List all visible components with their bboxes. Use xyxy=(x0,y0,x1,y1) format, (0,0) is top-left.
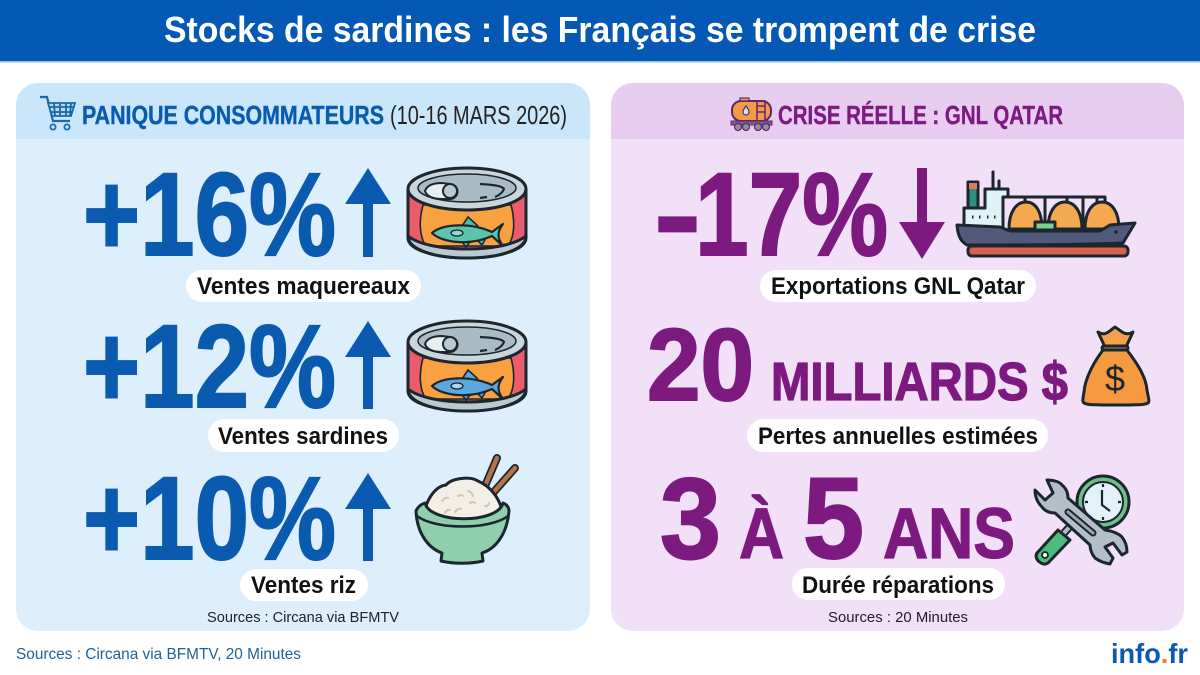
label pill: ventes sardines: Ventes sardines xyxy=(218,423,388,450)
stat: 3 à 5 ans: ANS xyxy=(883,495,1015,574)
label pill: ventes riz: Ventes riz xyxy=(251,572,356,599)
stat: +12%: +12% xyxy=(83,301,336,433)
footer sources: Sources : Circana via BFMTV, 20 Minutes xyxy=(16,646,301,663)
arrow up xyxy=(345,168,391,257)
stat: -17%: 17% xyxy=(695,149,888,281)
icon: money bag xyxy=(1083,327,1149,405)
stat: +16%: +16% xyxy=(83,149,336,281)
arrow down xyxy=(899,168,945,259)
stat: -17% xyxy=(654,149,888,281)
title banner: Stocks de sardines : les Français se trompent de crise xyxy=(164,9,1036,50)
source note: Sources : 20 Minutes xyxy=(828,609,968,626)
icon: rice bowl xyxy=(416,458,515,563)
stat: 20 milliards $: 20 xyxy=(647,308,754,422)
label pill: exportations GNL Qatar: Exportations GNL Qatar xyxy=(771,273,1025,300)
label pill: durée réparations: Durée réparations xyxy=(802,572,994,599)
icon: shopping cart xyxy=(40,97,75,130)
icon: sardine can xyxy=(408,321,526,411)
icon: LNG carrier ship xyxy=(957,172,1135,256)
panel heading: (10-16 MARS 2026) xyxy=(390,100,567,130)
stat: -17%: - xyxy=(654,149,701,281)
title banner xyxy=(0,0,1200,62)
label pill: ventes maquereaux: Ventes maquereaux xyxy=(197,273,411,300)
icon: money bag: $ xyxy=(1105,358,1125,399)
stat: 3 à 5 ans: 3 xyxy=(660,455,721,583)
stat: 20 milliards $: MILLIARDS $ xyxy=(771,352,1068,412)
stat: 3 à 5 ans xyxy=(660,455,1015,583)
panel: panique consommateurs xyxy=(16,83,590,631)
stat: 20 milliards $ xyxy=(647,308,1068,422)
icon: tanker wagon xyxy=(731,98,772,130)
panel: crise réelle xyxy=(611,83,1184,631)
source note: Sources : Circana via BFMTV xyxy=(207,609,399,626)
icon: mackerel can xyxy=(408,168,526,258)
icon: wrench and clock xyxy=(1035,476,1129,564)
arrow up xyxy=(345,473,391,561)
stat: 3 à 5 ans: 5 xyxy=(803,455,864,583)
stat: +10%: +10% xyxy=(83,453,336,585)
label pill: pertes annuelles: Pertes annuelles estimées xyxy=(758,423,1038,450)
stat: 3 à 5 ans: À xyxy=(739,495,784,574)
logo: info.fr: info.fr xyxy=(1111,638,1188,669)
panel heading: CRISE RÉELLE : GNL QATAR xyxy=(778,100,1063,130)
panel heading: PANIQUE CONSOMMATEURS xyxy=(82,100,384,130)
arrow up xyxy=(345,321,391,409)
